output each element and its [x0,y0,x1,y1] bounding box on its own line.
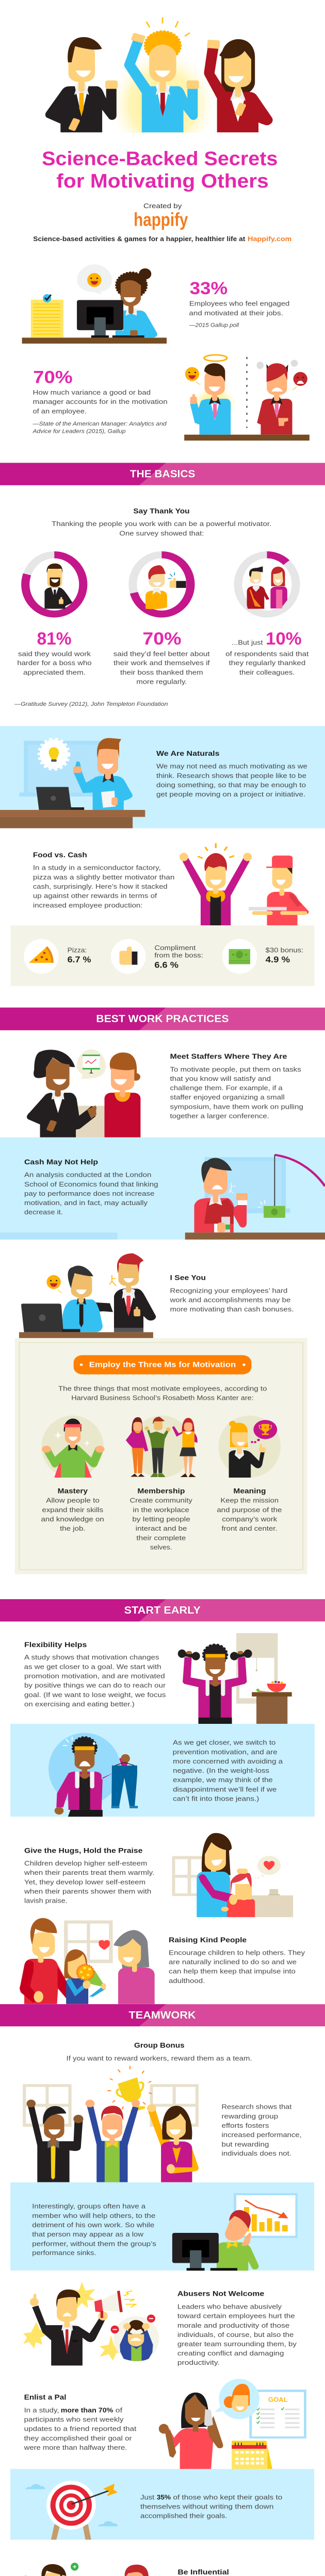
text: meet staffers: symposium, have them work on pulling [170,1104,303,1111]
panel background: low performer [10,2182,314,2270]
panel: prevention motivation [10,1724,315,1817]
illustration: abusive boss with megaphone [23,2282,159,2366]
text: group bonus intro: If you want to reward workers, reward them as a team. [67,2055,252,2062]
text: raising kind people: Encourage children to help others. They [169,1950,305,1957]
text: 33% description: Employees who feel engaged [189,300,289,308]
text: raising kind people [169,1950,305,1985]
illustration: woman exercising at home [178,1633,292,1724]
stat: 33%: 33% [190,278,228,298]
section: three ms [0,1385,325,1621]
text: low performer: detriment of his own work. So while [32,2222,154,2229]
heading: we are naturals: We Are Naturals [156,750,219,758]
text: 10% description: their colleagues. [239,669,295,676]
text: abusers not welcome: individuals, of course, but also the [177,2331,294,2339]
banner: the basics [0,463,325,485]
text: 70% description: said they’d feel better about [113,650,210,658]
text: abusers not welcome: creating conflict and damaging [177,2350,284,2358]
text: three ms intro: The three things that most motivate employees, according to [58,1385,267,1393]
heading: i see you: I See You [170,1274,206,1282]
text: membership: in the workplace [133,1506,189,1514]
illustration: worried employee with falling chart [172,2193,298,2270]
text: meaning: company’s work [222,1516,278,1523]
text: written goals: Just [140,2494,154,2501]
illustration: mastery [41,1416,105,1478]
stat: pizza: Pizza: [68,947,87,954]
text: we are naturals [156,763,307,799]
text: food vs cash: pizza was a slightly better motivator than [33,874,174,882]
text: prevention motivation: disappointment we’ll feel if we [173,1786,277,1793]
stat: 70%: 70% [142,629,182,648]
text: abusers not welcome: toward certain employees hurt the [177,2313,295,2320]
text: enlist a pal: participants who sent weekly [24,2416,124,2424]
text: food vs cash [33,865,174,909]
text: meet staffers: together a larger conference. [170,1112,269,1120]
text: group bonus research: efforts fosters [222,2122,269,2130]
text: low performer [32,2203,156,2257]
text: enlist a pal: updates to a friend reported that [24,2426,136,2433]
text: 70% description: their work and themselves if [113,659,210,667]
illustration: three cheering colleagues [45,18,273,164]
text: prevention motivation: more concerned with avoiding a [173,1758,283,1766]
heading: cash may not help: Cash May Not Help [24,1158,98,1166]
illustration: calendar [180,2441,272,2469]
text: 81% description: appreciated them. [23,669,86,676]
text: group bonus research: individuals does not. [222,2150,291,2158]
text: low performer: Interestingly, groups often have a [32,2203,146,2210]
text: i see you: Recognizing your employees’ hard [170,1287,287,1295]
panel: reward comparison [10,925,315,986]
text: meet staffers: that you know will satisfy and [170,1075,271,1083]
source: gratitude survey: —Gratitude Survey (2012), John Templeton Foundation [14,701,168,707]
text: raising kind people: adulthood. [169,1977,205,1985]
text: cash may not help: School of Economics found that linking [24,1181,158,1189]
text: enlist a pal [24,2407,136,2452]
text: written goals: accomplished their goals. [140,2512,227,2520]
text: cash may not help: pay to performance does not increase [24,1190,154,1198]
illustration: cheering woman and pizza delivery [180,843,309,925]
panel: written goals [10,2469,314,2540]
text: enlist a pal: more than 70% [61,2407,113,2414]
banner: teamwork [0,2004,325,2026]
text: flexibility helps: goal. (If we want to lose weight, we focus [24,1691,166,1699]
text: meaning: Meaning [233,1487,266,1495]
text: low performer: that person may appear as a low [32,2231,144,2239]
text: flexibility helps: A study shows that motivation changes [24,1654,159,1662]
section: cash may not help and i see you [0,1049,325,1574]
text: 33% description: —2015 Gallup poll [189,321,239,328]
text: give the hugs: when their parents shower them with [24,1888,151,1895]
text: i see you: more motivating than cash bonuses. [170,1306,294,1313]
text: mastery [41,1487,104,1533]
text: enlist a pal: they accomplished their goal or [24,2435,132,2443]
heading: enlist a pal: Enlist a Pal [24,2394,67,2401]
text: 81% description: harder for a boss who [17,659,92,667]
text: give the hugs: Yet, they develop lower self-esteem [24,1878,145,1886]
text: mastery: and knowledge on [41,1516,104,1523]
text: prevention motivation: can’t fit into those jeans.) [173,1795,259,1803]
banner: start early: START EARLY [124,1604,201,1616]
tagline: Science-based activities & games for a happier, healthier life at [33,235,246,243]
text: three ms intro: Harvard Business School’s Rosabeth Moss Kanter are: [71,1394,254,1402]
stat: compliment: Compliment [154,944,196,952]
text: food vs cash: cash, surprisingly. Here’s how it stacked [33,883,168,891]
illustration: family with flowers [20,1918,155,2004]
text: flexibility helps: promotion motivation, and are motivated [24,1673,165,1680]
button: employ the three ms [74,1355,251,1375]
illustration: mother hugging child [172,1833,293,1917]
illustration: engaged employee at desk [22,264,167,344]
text: 70% description: of an employee. [32,408,87,415]
text: flexibility helps: as we get closer to a goal. We start with [24,1664,161,1671]
stat: compliment: from the boss: [154,952,203,959]
text: membership: interact and be [136,1525,187,1533]
text: abusers not welcome: Leaders who behave abusively [177,2303,282,2311]
stat: bonus: $30 bonus: [266,947,303,954]
text: 33% description: and motivated at their jobs. [189,310,283,317]
illustration: man reaching for dangling cash [0,1155,325,1240]
banner: best work practices: BEST WORK PRACTICES [96,1013,229,1024]
title: for Motivating Others [56,170,269,192]
stat: compliment [154,944,203,970]
text: group bonus research: increased performance, [222,2131,302,2139]
text: i see you: work and accomplishments may be [169,1296,290,1304]
text: meaning: and purpose of the [217,1506,282,1514]
title: Science-Backed Secrets [42,147,278,170]
heading: abusers not welcome: Abusers Not Welcome [177,2290,264,2298]
section: goals and influence [0,2441,325,2576]
section: intro stats [0,264,325,537]
text: give the hugs [24,1860,154,1905]
text: membership: Create community [130,1497,193,1504]
text: membership: by letting people [132,1516,190,1523]
text: 70% description: their boss thanked them [120,669,203,676]
text: we are naturals: We may not need as much motivating as we [156,763,307,770]
section: raising kind people and teamwork [0,1918,325,2270]
text: 70% description: more regularly. [136,679,187,686]
text: 81% description: said they would work [18,650,91,658]
text: mastery: Allow people to [46,1497,100,1504]
text: abusers not welcome: greater team surrounding them, by [177,2341,297,2348]
chart: donut 81% [25,555,83,614]
section: teamwork continued [23,2193,306,2469]
text: 33% description [189,300,289,328]
stat: 81%: 81% [37,629,72,648]
text: 10% description: they regularly thanked [229,659,305,667]
text: meaning [217,1487,282,1533]
tagline link: Happify.com [248,235,291,243]
text: membership: selves. [150,1544,172,1551]
text: 70% description: How much variance a good or bad [32,389,151,397]
text: flexibility helps [24,1654,166,1708]
text: prevention motivation: As we get closer, we switch to [173,1739,275,1747]
text: prevention motivation: prevention motivation, and are [173,1749,278,1756]
stat: compliment: 6.6 % [154,960,178,970]
text: abusers not welcome: productivity. [177,2359,220,2367]
text: give the hugs: Children develop higher self-esteem [24,1860,147,1868]
text: i see you [169,1287,294,1313]
text: 70% description [113,650,210,686]
text: group bonus research: rewarding group [222,2113,278,2121]
illustration: team celebrating with trophy [23,2066,199,2182]
text: meet staffers: staffer enjoyed organizing a small [170,1094,285,1101]
heading: meet staffers: Meet Staffers Where They Are [170,1053,287,1061]
panel: cash may not help [0,1138,325,1240]
text: prevention motivation [173,1739,283,1803]
text: enlist a pal: of [116,2407,123,2414]
text: food vs cash: increased employee production: [33,902,142,909]
text: cash may not help: motivation, and in fact, may actually [24,1199,148,1207]
section: header [33,18,291,243]
text: membership: their complete [136,1534,186,1542]
stat: 70%: 70% [33,367,73,387]
text: prevention motivation: negative. (In the weight-loss [173,1767,269,1775]
text: low performer: member who will help others, to the [32,2212,155,2220]
text: enlist a pal: In a study, [24,2407,59,2414]
illustration: woman on phone with goal board: GOAL [268,2396,288,2403]
text: 70% description [32,389,168,434]
illustration: membership [126,1416,198,1478]
title [42,147,278,192]
text: enlist a pal: were more than halfway there. [24,2444,127,2452]
banner: the basics: THE BASICS [130,468,195,480]
banner: best work practices [0,1008,325,1030]
text: mastery: expand their skills [42,1506,103,1514]
text: we are naturals: doing something, so that may be enough to [156,782,306,789]
illustration: influential coworkers [0,2563,157,2576]
heading: say thank you: Say Thank You [133,507,190,515]
text: we are naturals: think. Research shows that people like to be [156,772,306,780]
heading: raising kind people: Raising Kind People [169,1936,247,1944]
heading: give the hugs: Give the Hugs, Hold the Praise [24,1847,142,1855]
section: start early [10,1633,315,1917]
stat: pizza [68,947,91,964]
text: thank you intro [52,520,271,537]
illustration: two colleagues talking [27,1049,140,1138]
text: give the hugs: when their parents treat them warmly. [24,1869,154,1877]
text: mastery: the job. [60,1525,86,1533]
text: 10% description: of respondents said that [225,650,308,658]
text: written goals: themselves without writing them down [140,2503,273,2511]
heading: flexibility helps: Flexibility Helps [24,1641,87,1649]
text: 70% description: —State of the American Manager: Analytics and [32,420,167,427]
text: cash may not help [24,1172,158,1216]
text: written goals: of those who kept their goals to [173,2494,282,2501]
illustration: good manager vs bad manager [184,355,310,440]
text: raising kind people: are naturally inclined to do so and we [169,1958,297,1966]
text: meet staffers: challenge them. For example, if a [170,1084,283,1092]
text: meaning: front and center. [222,1525,278,1533]
text: give the hugs: lavish praise. [24,1897,68,1905]
heading: food vs cash: Food vs. Cash [33,851,87,859]
section: thank you stats and naturals [0,555,325,828]
banner: start early [0,1599,325,1621]
text: food vs cash: In a study in a semiconductor factory, [33,865,161,872]
illustration: target with arrow [25,2481,118,2540]
icon: pizza [24,939,59,974]
text: group bonus research [222,2104,302,2158]
text: abusers not welcome: morale and productivity of those [177,2322,289,2329]
illustration: meaning [218,1416,281,1478]
stat: 10%: 10% [266,629,302,648]
text: meaning: Keep the mission [221,1497,279,1504]
text: 70% description: Advice for Leaders (2015), Gallup [32,428,126,434]
text: flexibility helps: by positive things we can do to reach our [24,1682,166,1689]
text: raising kind people: can help them keep that impulse into [169,1968,296,1975]
icon: thumbs up [111,939,145,974]
text: written goals [140,2494,282,2520]
text: thank you intro: One survey showed that: [119,530,204,537]
icon: cash [222,939,257,974]
text: three ms intro [58,1385,267,1402]
illustration: boss praising employee at laptop [19,1253,156,1338]
text: group bonus research: but rewarding [222,2141,269,2148]
stat: pizza: 6.7 % [68,955,91,964]
stat: bonus: 4.9 % [266,955,290,964]
text: written goals: 35% [157,2494,171,2501]
text: membership: Membership [137,1487,185,1495]
text: membership [130,1487,193,1551]
text: mastery: Mastery [58,1487,88,1495]
banner: teamwork: TEAMWORK [129,2009,196,2021]
text: low performer: performer, without them the group’s [32,2240,156,2248]
text: 81% description [17,650,92,676]
text: food vs cash: up against other rewards in terms of [33,892,157,900]
text: meet staffers: To motivate people, put them on tasks [170,1066,301,1073]
text: but just label: ...But just [232,639,263,647]
chart: donut 70% [133,555,190,614]
text: low performer: performance sinks. [32,2249,96,2257]
panel: three ms for motivation [15,1338,307,1574]
text: cash may not help: decrease it. [24,1209,63,1216]
panel: we are naturals [0,726,325,828]
section: food vs cash [0,843,325,1120]
text: flexibility helps: on exercising and eating better.) [24,1701,135,1708]
text: thank you intro: Thanking the people you work with can be a powerful motivator. [52,520,271,528]
text: 10% description [225,650,308,676]
heading: be influential: Be Influential [177,2568,229,2576]
text: group bonus research: Research shows that [222,2104,291,2111]
text: prevention motivation: example, we may think of the [173,1776,273,1784]
created by: Created by [143,202,182,210]
text: cash may not help: An analysis conducted at the London [24,1172,151,1179]
text: meet staffers [170,1066,303,1120]
stat: bonus [266,947,303,964]
illustration: woman holding jeans [48,1733,138,1817]
heading: group bonus: Group Bonus [134,2042,185,2049]
text: abusers not welcome [177,2303,297,2367]
chart: donut 10% [238,555,296,614]
illustration: man with idea at laptop [0,738,145,828]
text: we are naturals: get people moving on a project or initiative. [156,791,305,799]
logo: happify: happify [134,210,188,230]
text: 70% description: manager accounts for in the motivation [32,398,168,406]
illustration: woman on phone with goal board [159,2379,306,2469]
button: employ the three ms: Employ the Three Ms for Motivation [89,1361,236,1369]
